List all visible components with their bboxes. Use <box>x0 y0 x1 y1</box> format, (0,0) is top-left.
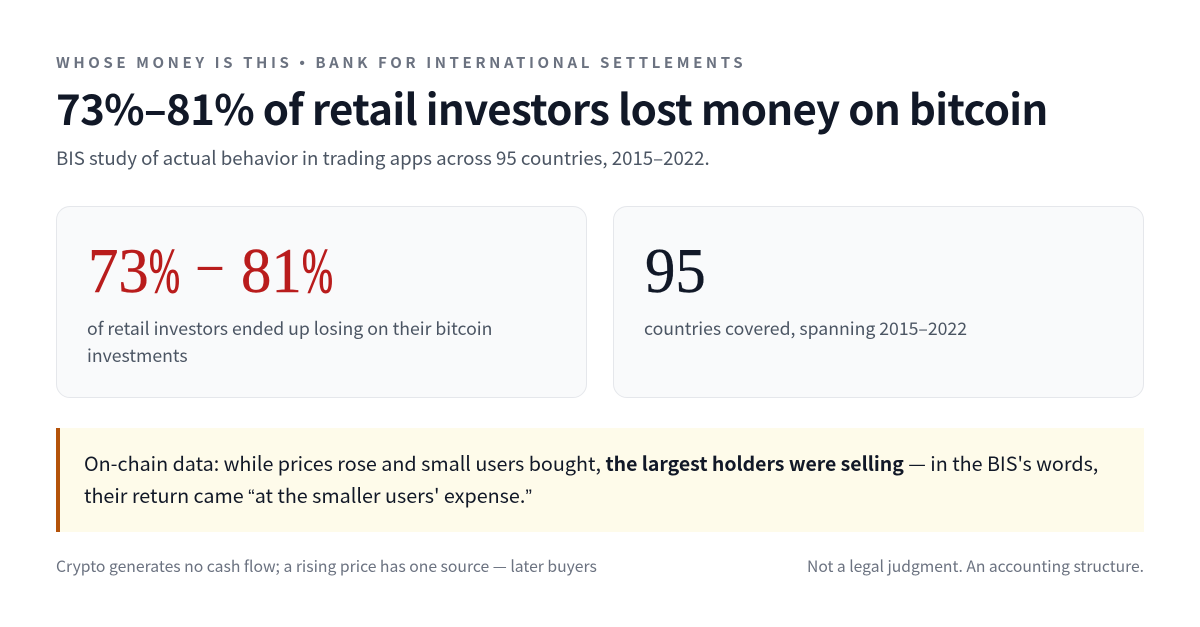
subtitle: BIS study of actual behavior in trading apps across 95 countries, 2015–2022. <box>56 144 710 171</box>
stat: 95: 95 <box>645 235 706 306</box>
stat description <box>87 316 492 368</box>
title: 73%–81% of retail investors lost money on bitcoin <box>56 77 1048 138</box>
footnote right: Not a legal judgment. An accounting structure. <box>807 554 1144 577</box>
callout text: On-chain data: while prices rose and small users bought, the largest holders were selling — in the BIS's words, <box>84 448 1098 477</box>
stat description: countries covered, spanning 2015–2022 <box>644 316 967 341</box>
eyebrow label: WHOSE MONEY IS THIS • BANK FOR INTERNATIONAL SETTLEMENTS <box>56 52 746 72</box>
stat: 73% – 81%: 73 <box>88 235 149 306</box>
callout <box>56 428 1144 532</box>
stat: 73% – 81%: – <box>198 226 222 297</box>
callout text: their return came “at the smaller users' expense.” <box>84 480 532 509</box>
footnote left: Crypto generates no cash flow; a rising price has one source — later buyers <box>56 554 597 577</box>
stat: 73% – 81%: 81 <box>241 235 302 306</box>
callout accent bar <box>56 428 60 532</box>
stat description: of retail investors ended up losing on their bitcoin <box>87 316 492 341</box>
stat description: investments <box>87 343 188 368</box>
stat: 73% – 81%: % <box>302 235 333 306</box>
panel: coverage stat <box>613 206 1144 398</box>
stat: 73% – 81% <box>88 226 333 306</box>
stat: 73% – 81%: % <box>149 235 180 306</box>
callout text <box>84 448 1098 509</box>
panel: loss share stat <box>56 206 587 398</box>
